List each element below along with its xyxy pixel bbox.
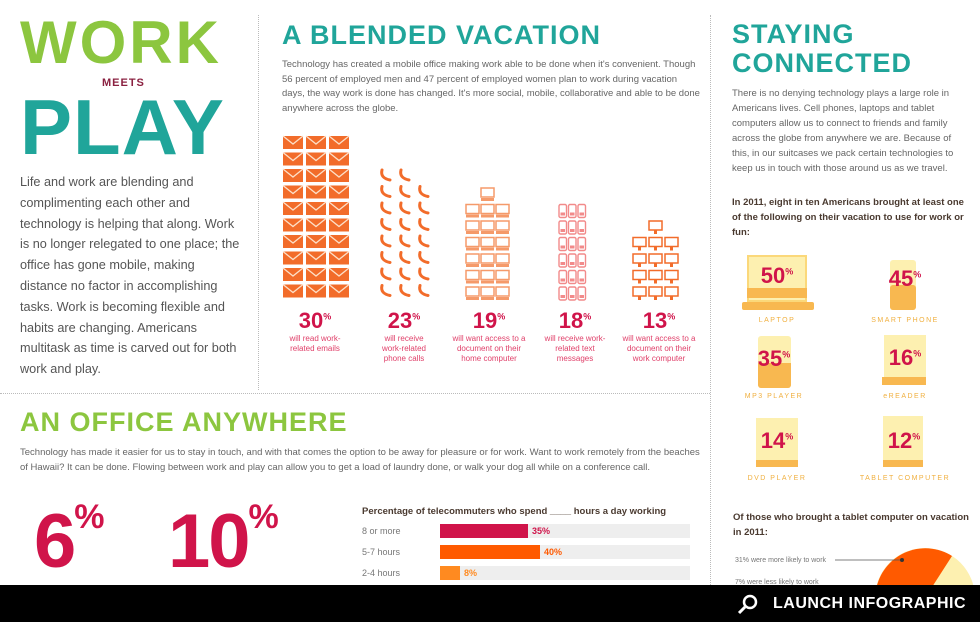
stat: 19% home computer: will want access to a document on their home computer: [453, 334, 525, 363]
text: blended vacation: Technology has created a mobile office making work able to be done when it's convenient. Though 56 percent of employed men and 47 percent of employed women plan to work during vacation days, the way work is done has changed. It's more social, mobile, collaborative and able to be done anywhere across the globe.: [282, 59, 700, 114]
icons: home computers: [465, 187, 510, 302]
bar chart: telecommuters hours: 2-4 hours: [362, 568, 400, 578]
bar chart: telecommuters hours: [362, 506, 690, 580]
text: bold lead: In 2011, eight in ten Americans brought at least one of the following on their vacation to use for work or fun:: [732, 197, 964, 238]
device: mp3 player: MP3 PLAYER: [745, 393, 803, 400]
icons: work computers: [632, 220, 680, 302]
text: office anywhere: Technology has made it easier for us to stay in touch, and with that comes the option to be away for pleasure or for work. Want to work remotely from the beaches of Hawaii? It can be done. Flowing between work and play can allow you to get a load of laundry done, or walk your dog all while on a conference call.: [20, 447, 700, 472]
heading: staying connected: [732, 19, 912, 78]
device: tablet computer: [860, 416, 950, 482]
device: smart phone: 45%: [889, 266, 921, 291]
stat: 30% emails: [289, 308, 341, 353]
stat: 30% emails: will read work-related emails: [289, 334, 341, 353]
device: dvd player: 14%: [761, 428, 793, 453]
heading: staying connected: STAYING: [732, 19, 855, 49]
bar chart: telecommuters hours: 5-7 hours: [362, 547, 400, 557]
device: ereader: [882, 335, 927, 400]
pie chart: tablet work: 31% were more likely to work: [735, 557, 827, 564]
title: work meets play: [20, 9, 225, 171]
stat: 6%: 6%: [34, 498, 103, 584]
title: work meets play: WORK: [20, 9, 222, 76]
bar chart: telecommuters hours: 40%: [544, 547, 562, 557]
icons: text messages: [558, 204, 586, 302]
stat: 18% texts: 18%: [559, 308, 591, 333]
heading: staying connected: CONNECTED: [732, 48, 912, 78]
stat: 23% phone calls: will receive work-related phone calls: [382, 334, 426, 363]
title: work meets play: PLAY: [20, 83, 225, 171]
device: mp3 player: 35%: [758, 346, 790, 371]
text: tablet lead: Of those who brought a tablet computer on vacation in 2011:: [733, 512, 969, 538]
footer bar: launch infographic: [0, 585, 980, 622]
title: work meets play: MEETS: [102, 77, 145, 89]
bar chart: telecommuters hours: 8 or more: [362, 526, 401, 536]
stat: 23% phone calls: 23%: [388, 308, 420, 333]
intro text: Life and work are blending and complimenting each other and technology is helping that along. Work is no longer relegated to one place; the office has gone mobile, making distance no factor in accomplishing tasks. Work is becoming flexible and habits are changing. Americans multitask as time is carved out for both work and play.: [20, 175, 239, 376]
stat: 19% home computer: 19%: [473, 308, 505, 333]
device: tablet computer: 12%: [888, 428, 920, 453]
device: smart phone: [871, 260, 939, 324]
device: dvd player: [748, 418, 806, 482]
bar chart: telecommuters hours: Percentage of telecommuters who spend ____ hours a day working: [362, 506, 666, 517]
stat: 13% work computer: [622, 308, 696, 363]
stat: 23% phone calls: [382, 308, 426, 363]
device: tablet computer: TABLET COMPUTER: [860, 475, 950, 482]
device: laptop: LAPTOP: [759, 317, 795, 324]
pie chart: tablet work: [735, 548, 974, 586]
stat: 13% work computer: will want access to a document on their work computer: [623, 334, 695, 363]
stat: 18% texts: [544, 308, 606, 363]
heading: an office anywhere: AN OFFICE ANYWHERE: [20, 407, 348, 437]
icons: phones: [377, 167, 434, 299]
stat: 30% emails: 30%: [299, 308, 331, 333]
device: mp3 player: [745, 336, 803, 400]
device: ereader: eREADER: [883, 393, 927, 400]
device: laptop: [742, 255, 814, 324]
bar chart: telecommuters hours: 8%: [464, 568, 477, 578]
text: staying connected: There is no denying technology plays a large role in Americans lives. Cell phones, laptops and tablet computers allow us to connect to friends and family across the globe from anywhere we are. Because of this, in our suitcases we pack certain technologies to keep us in touch with those around us as we travel.: [732, 88, 953, 174]
stat: 19% home computer: [452, 308, 526, 363]
device: ereader: 16%: [889, 345, 921, 370]
pie chart: tablet work: 7% were less likely to work: [735, 579, 819, 586]
device: dvd player: DVD PLAYER: [748, 475, 806, 482]
bar chart: telecommuters hours: 35%: [532, 526, 550, 536]
icons: emails: [282, 135, 351, 300]
stat: 13% work computer: 13%: [643, 308, 675, 333]
icon: magnifier: [738, 594, 758, 614]
device: smart phone: SMART PHONE: [871, 317, 939, 324]
footer bar: launch infographic: LAUNCH INFOGRAPHIC: [773, 595, 966, 612]
chart: pictograph icons: [282, 136, 679, 301]
device: laptop: 50%: [761, 263, 793, 288]
heading: a blended vacation: A BLENDED VACATION: [282, 20, 601, 50]
stat: 18% texts: will receive work-related text messages: [545, 334, 605, 363]
stat: 10%: 10%: [168, 498, 277, 584]
